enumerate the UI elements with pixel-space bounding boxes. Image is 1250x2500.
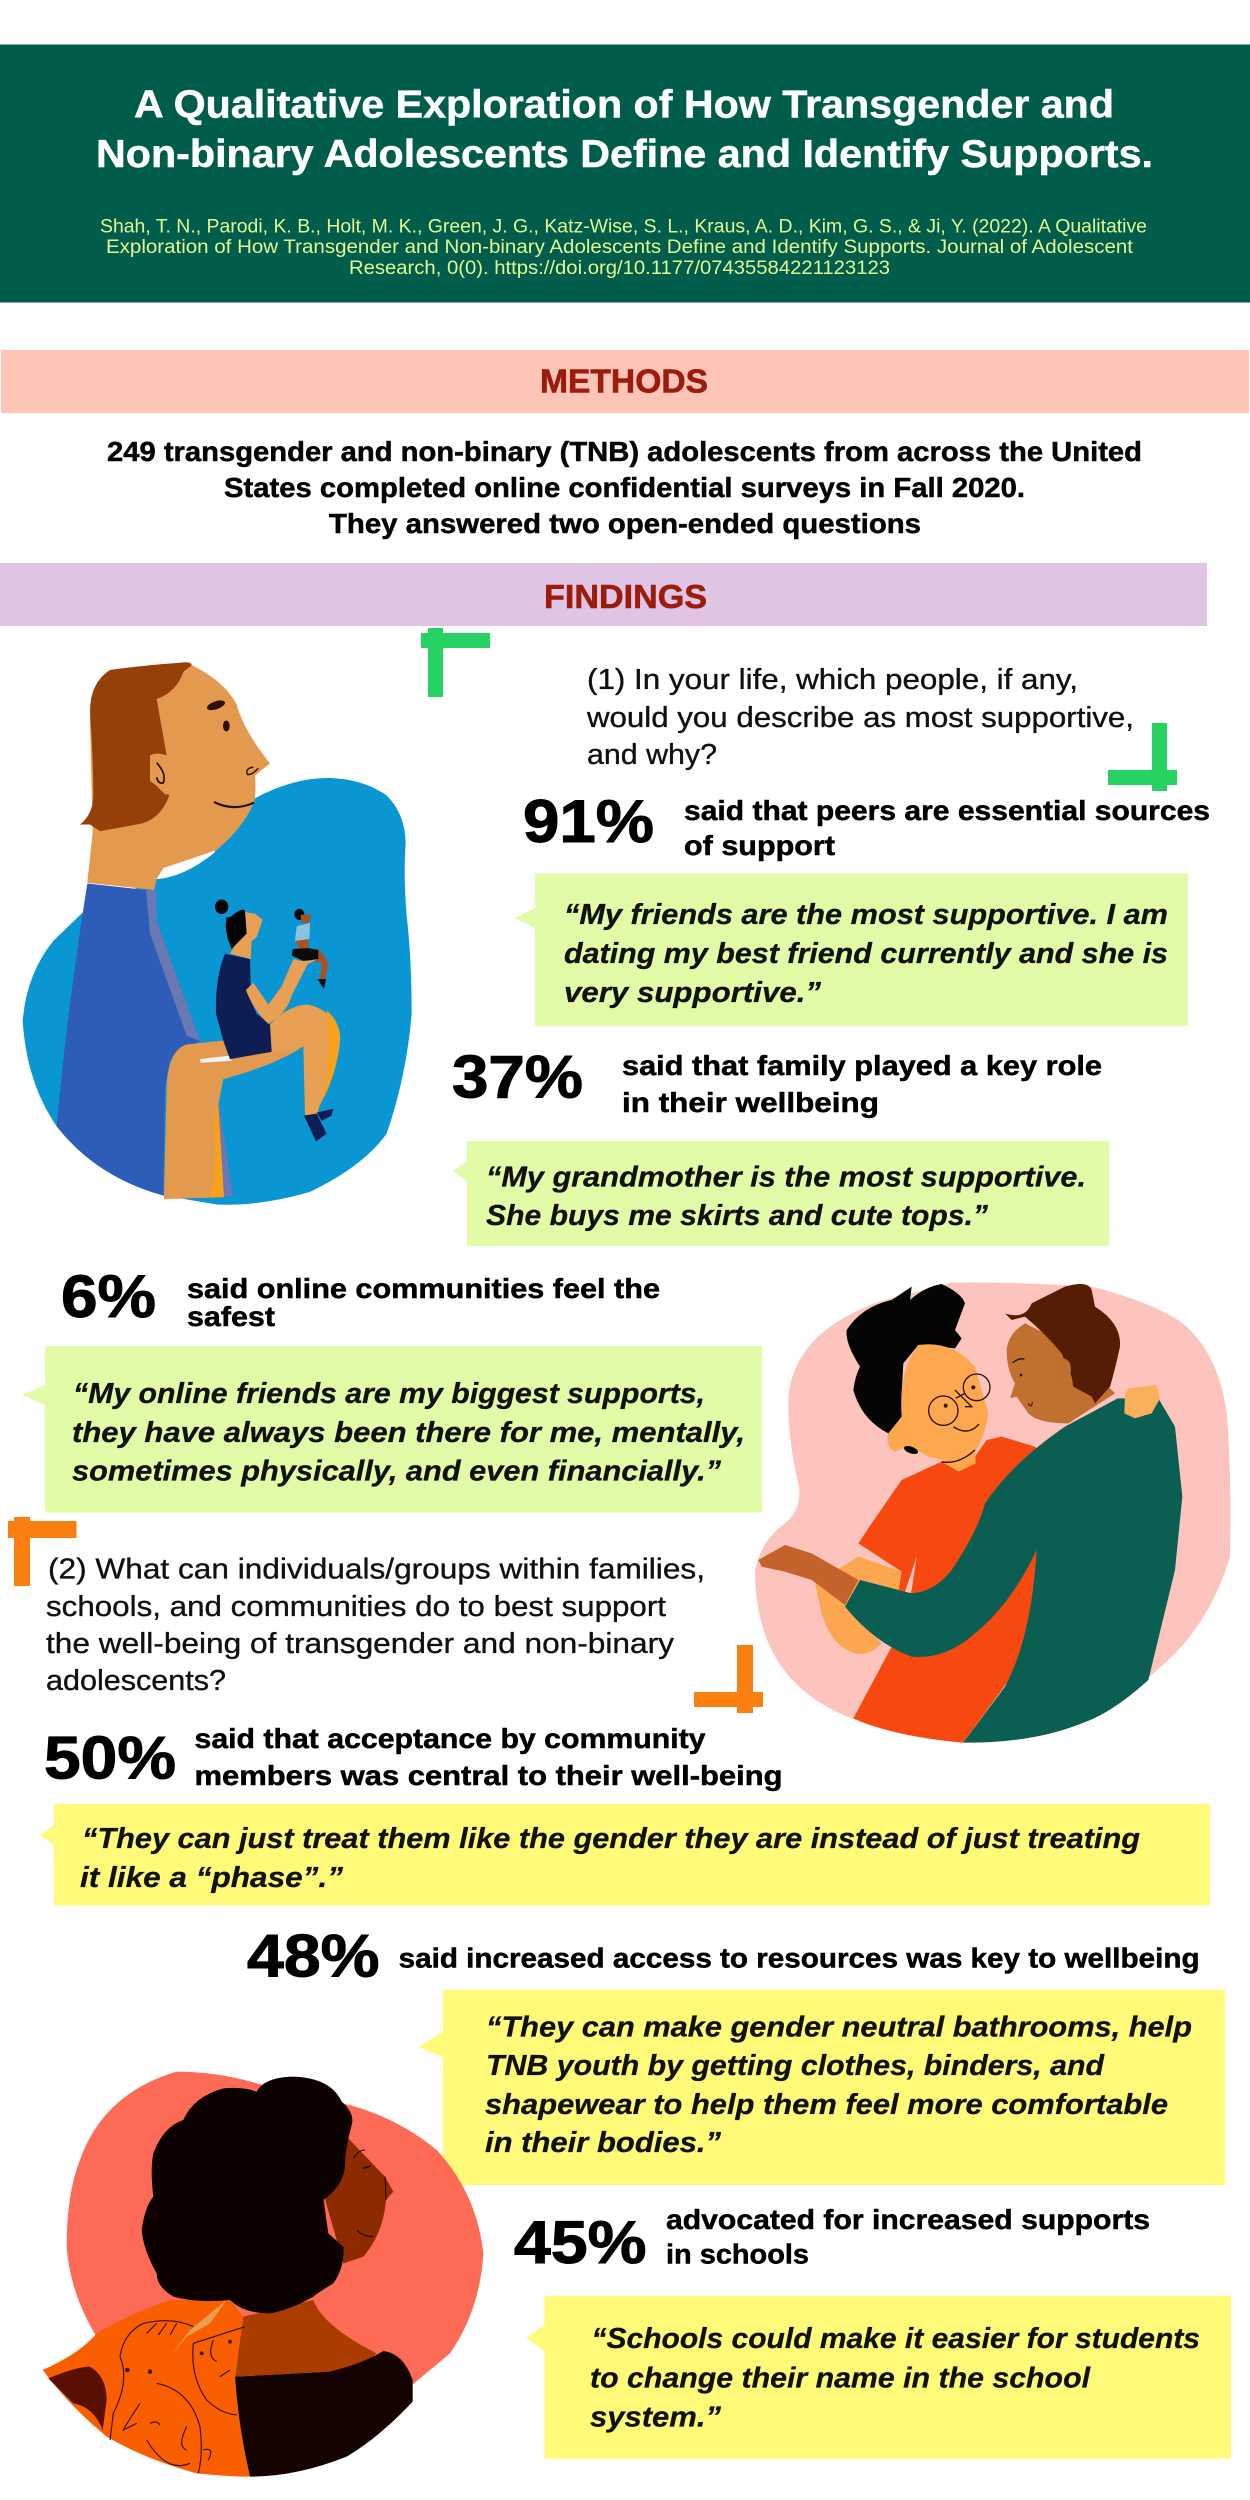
question text: and why? bbox=[587, 739, 717, 771]
methods heading bbox=[1, 350, 1249, 413]
neck bbox=[942, 1450, 976, 1472]
statistic: 91% bbox=[523, 788, 1210, 861]
statistic: 45%: in schools bbox=[666, 2239, 809, 2270]
neck bbox=[235, 2300, 377, 2377]
citation: Shah, T. N., Parodi, K. B., Holt, M. K., Green, J. G., Katz-Wise, S. L., Kraus, A. D., Kim, G. S., & Ji, Y. (2022). A Qualitative bbox=[100, 217, 1147, 238]
statistic: 50%: said that acceptance by community bbox=[194, 1723, 706, 1754]
statistic: 45%: advocated for increased supports bbox=[666, 2204, 1150, 2235]
quote: schools: to change their name in the school bbox=[590, 2362, 1091, 2394]
citation: Exploration of How Transgender and Non-binary Adolescents Define and Identify Supports. Journal of Adolescent bbox=[106, 237, 1134, 258]
statistic: 50%: members was central to their well-being bbox=[194, 1760, 782, 1791]
statistic: 37% bbox=[452, 1044, 1102, 1118]
statistic: 48% bbox=[247, 1922, 1200, 1990]
orange shirt bbox=[43, 2300, 250, 2477]
statistic: 91%: said that peers are essential sources bbox=[684, 795, 1210, 826]
face bbox=[323, 2137, 393, 2263]
facial features bbox=[157, 698, 258, 807]
quote: online friends: they have always been there for me, mentally, bbox=[72, 1417, 745, 1449]
tiny friend on palm bbox=[292, 909, 328, 989]
statistic: 6% bbox=[61, 1263, 660, 1332]
quote: friends: dating my best friend currently and she is bbox=[564, 938, 1168, 970]
orange shirt bbox=[853, 1437, 1078, 1743]
face and neck bbox=[87, 663, 270, 890]
curly hair bbox=[142, 2077, 352, 2313]
quote: online friends bbox=[22, 1346, 762, 1512]
question text: the well-being of transgender and non-binary bbox=[46, 1628, 675, 1660]
statistic: 6%: 6% bbox=[61, 1263, 156, 1330]
shirt print: line-art faces bbox=[110, 2321, 245, 2473]
light forearm bbox=[815, 1557, 902, 1654]
green bracket top-left bbox=[421, 628, 490, 697]
methods text: They answered two open-ended questions bbox=[329, 508, 921, 539]
statistic: 50% bbox=[44, 1723, 782, 1792]
orange bracket bottom-right bbox=[694, 1645, 763, 1713]
glasses and features bbox=[929, 1374, 990, 1462]
quote: bathrooms: “They can make gender neutral bathrooms, help bbox=[486, 2012, 1192, 2044]
illustration: two friends embracing bbox=[755, 1282, 1230, 1743]
title: A Qualitative Exploration of How Transgender and bbox=[134, 84, 1114, 126]
citation bbox=[100, 217, 1147, 279]
quote: bathrooms: in their bodies.” bbox=[485, 2127, 722, 2159]
statistic: 91%: of support bbox=[684, 830, 835, 861]
quote: bathrooms bbox=[418, 1990, 1225, 2185]
statistic: 91%: 91% bbox=[523, 788, 654, 855]
brown person's face bbox=[1007, 1323, 1115, 1423]
quote: phase bbox=[40, 1804, 1210, 1905]
question text: schools, and communities do to best support bbox=[46, 1591, 666, 1623]
pink blob bbox=[755, 1282, 1230, 1743]
quote: schools: system.” bbox=[590, 2402, 722, 2434]
question text: (2) What can individuals/groups within families, bbox=[48, 1554, 705, 1586]
statistic: 45%: 45% bbox=[514, 2209, 646, 2276]
quote: friends: “My friends are the most supportive. I am bbox=[564, 899, 1168, 931]
statistic: 37%: said that family played a key role bbox=[622, 1050, 1102, 1081]
question text bbox=[46, 1554, 705, 1697]
coral circle bbox=[67, 2072, 483, 2387]
quote: friends: very supportive.” bbox=[564, 977, 822, 1009]
question text bbox=[586, 664, 1134, 771]
brown hair bbox=[1005, 1284, 1120, 1403]
methods heading: METHODS bbox=[540, 363, 708, 400]
question text: would you describe as most supportive, bbox=[586, 702, 1134, 734]
methods text: 249 transgender and non-binary (TNB) adolescents from across the United bbox=[107, 436, 1142, 467]
quote: online friends: “My online friends are my biggest supports, bbox=[73, 1378, 705, 1410]
blue blob bbox=[23, 778, 412, 1205]
brown person's features bbox=[1013, 1358, 1071, 1406]
quote: schools bbox=[526, 2296, 1231, 2459]
quote: grandmother bbox=[453, 1141, 1109, 1246]
orange bracket top-left bbox=[8, 1517, 76, 1586]
statistic: 37%: in their wellbeing bbox=[622, 1087, 879, 1118]
illustration: person holding friend on hand bbox=[23, 662, 412, 1205]
quote: friends bbox=[515, 874, 1188, 1026]
hand and arm bbox=[164, 1037, 303, 1199]
shirt print: dark hair bbox=[48, 2367, 107, 2430]
quote: phase: “They can just treat them like the gender they are instead of just treating bbox=[82, 1823, 1140, 1855]
quote: phase: it like a “phase”.” bbox=[80, 1862, 344, 1894]
quote: schools: “Schools could make it easier for students bbox=[592, 2323, 1200, 2355]
black hair bbox=[846, 1284, 965, 1433]
statistic: 48%: said increased access to resources was key to wellbeing bbox=[399, 1943, 1200, 1974]
methods text bbox=[107, 436, 1142, 539]
blue torso bbox=[57, 883, 200, 1195]
question text: (1) In your life, which people, if any, bbox=[587, 664, 1078, 696]
ear and earring bbox=[887, 1430, 919, 1456]
quote: bathrooms: TNB youth by getting clothes, binders, and bbox=[486, 2050, 1105, 2082]
illustration: person with curly hair seen from behind bbox=[43, 2072, 483, 2477]
statistic: 45% bbox=[514, 2204, 1150, 2276]
question 2 bbox=[8, 1517, 763, 1713]
statistic: 48%: 48% bbox=[247, 1922, 380, 1990]
ear bbox=[150, 755, 167, 795]
seated woman bbox=[215, 899, 340, 1142]
statistic: 6%: said online communities feel the bbox=[187, 1273, 660, 1304]
citation: Research, 0(0). https://doi.org/10.1177/07435584221123123 bbox=[349, 258, 890, 279]
face features bbox=[353, 2150, 386, 2237]
shirt fold bbox=[170, 2300, 227, 2357]
question text: adolescents? bbox=[46, 1665, 226, 1697]
title bbox=[96, 84, 1153, 176]
brown arm and hand bbox=[758, 1545, 858, 1605]
statistic: 50%: 50% bbox=[44, 1725, 176, 1792]
hair bbox=[80, 662, 192, 831]
quote: grandmother: She buys me skirts and cute tops.” bbox=[486, 1200, 989, 1232]
light face bbox=[888, 1344, 988, 1463]
green bracket bottom-right bbox=[1108, 723, 1177, 791]
findings heading bbox=[0, 563, 1207, 626]
header panel bbox=[0, 44, 1250, 302]
quote: grandmother: “My grandmother is the most supportive. bbox=[486, 1162, 1086, 1194]
statistic: 37%: 37% bbox=[452, 1044, 583, 1111]
quote: bathrooms: shapewear to help them feel more comfortable bbox=[485, 2089, 1168, 2121]
quote: online friends: sometimes physically, and even financially.” bbox=[72, 1456, 722, 1488]
findings heading: FINDINGS bbox=[544, 578, 707, 615]
methods text: States completed online confidential surveys in Fall 2020. bbox=[224, 472, 1025, 503]
question 1 bbox=[421, 628, 1177, 791]
ear bbox=[313, 2195, 328, 2235]
green jacket bbox=[845, 1398, 1182, 1743]
title: Non-binary Adolescents Define and Identify Supports. bbox=[96, 133, 1153, 176]
black top bbox=[235, 2351, 413, 2477]
statistic: 6%: safest bbox=[187, 1301, 275, 1332]
hand on shoulder bbox=[1124, 1385, 1160, 1418]
